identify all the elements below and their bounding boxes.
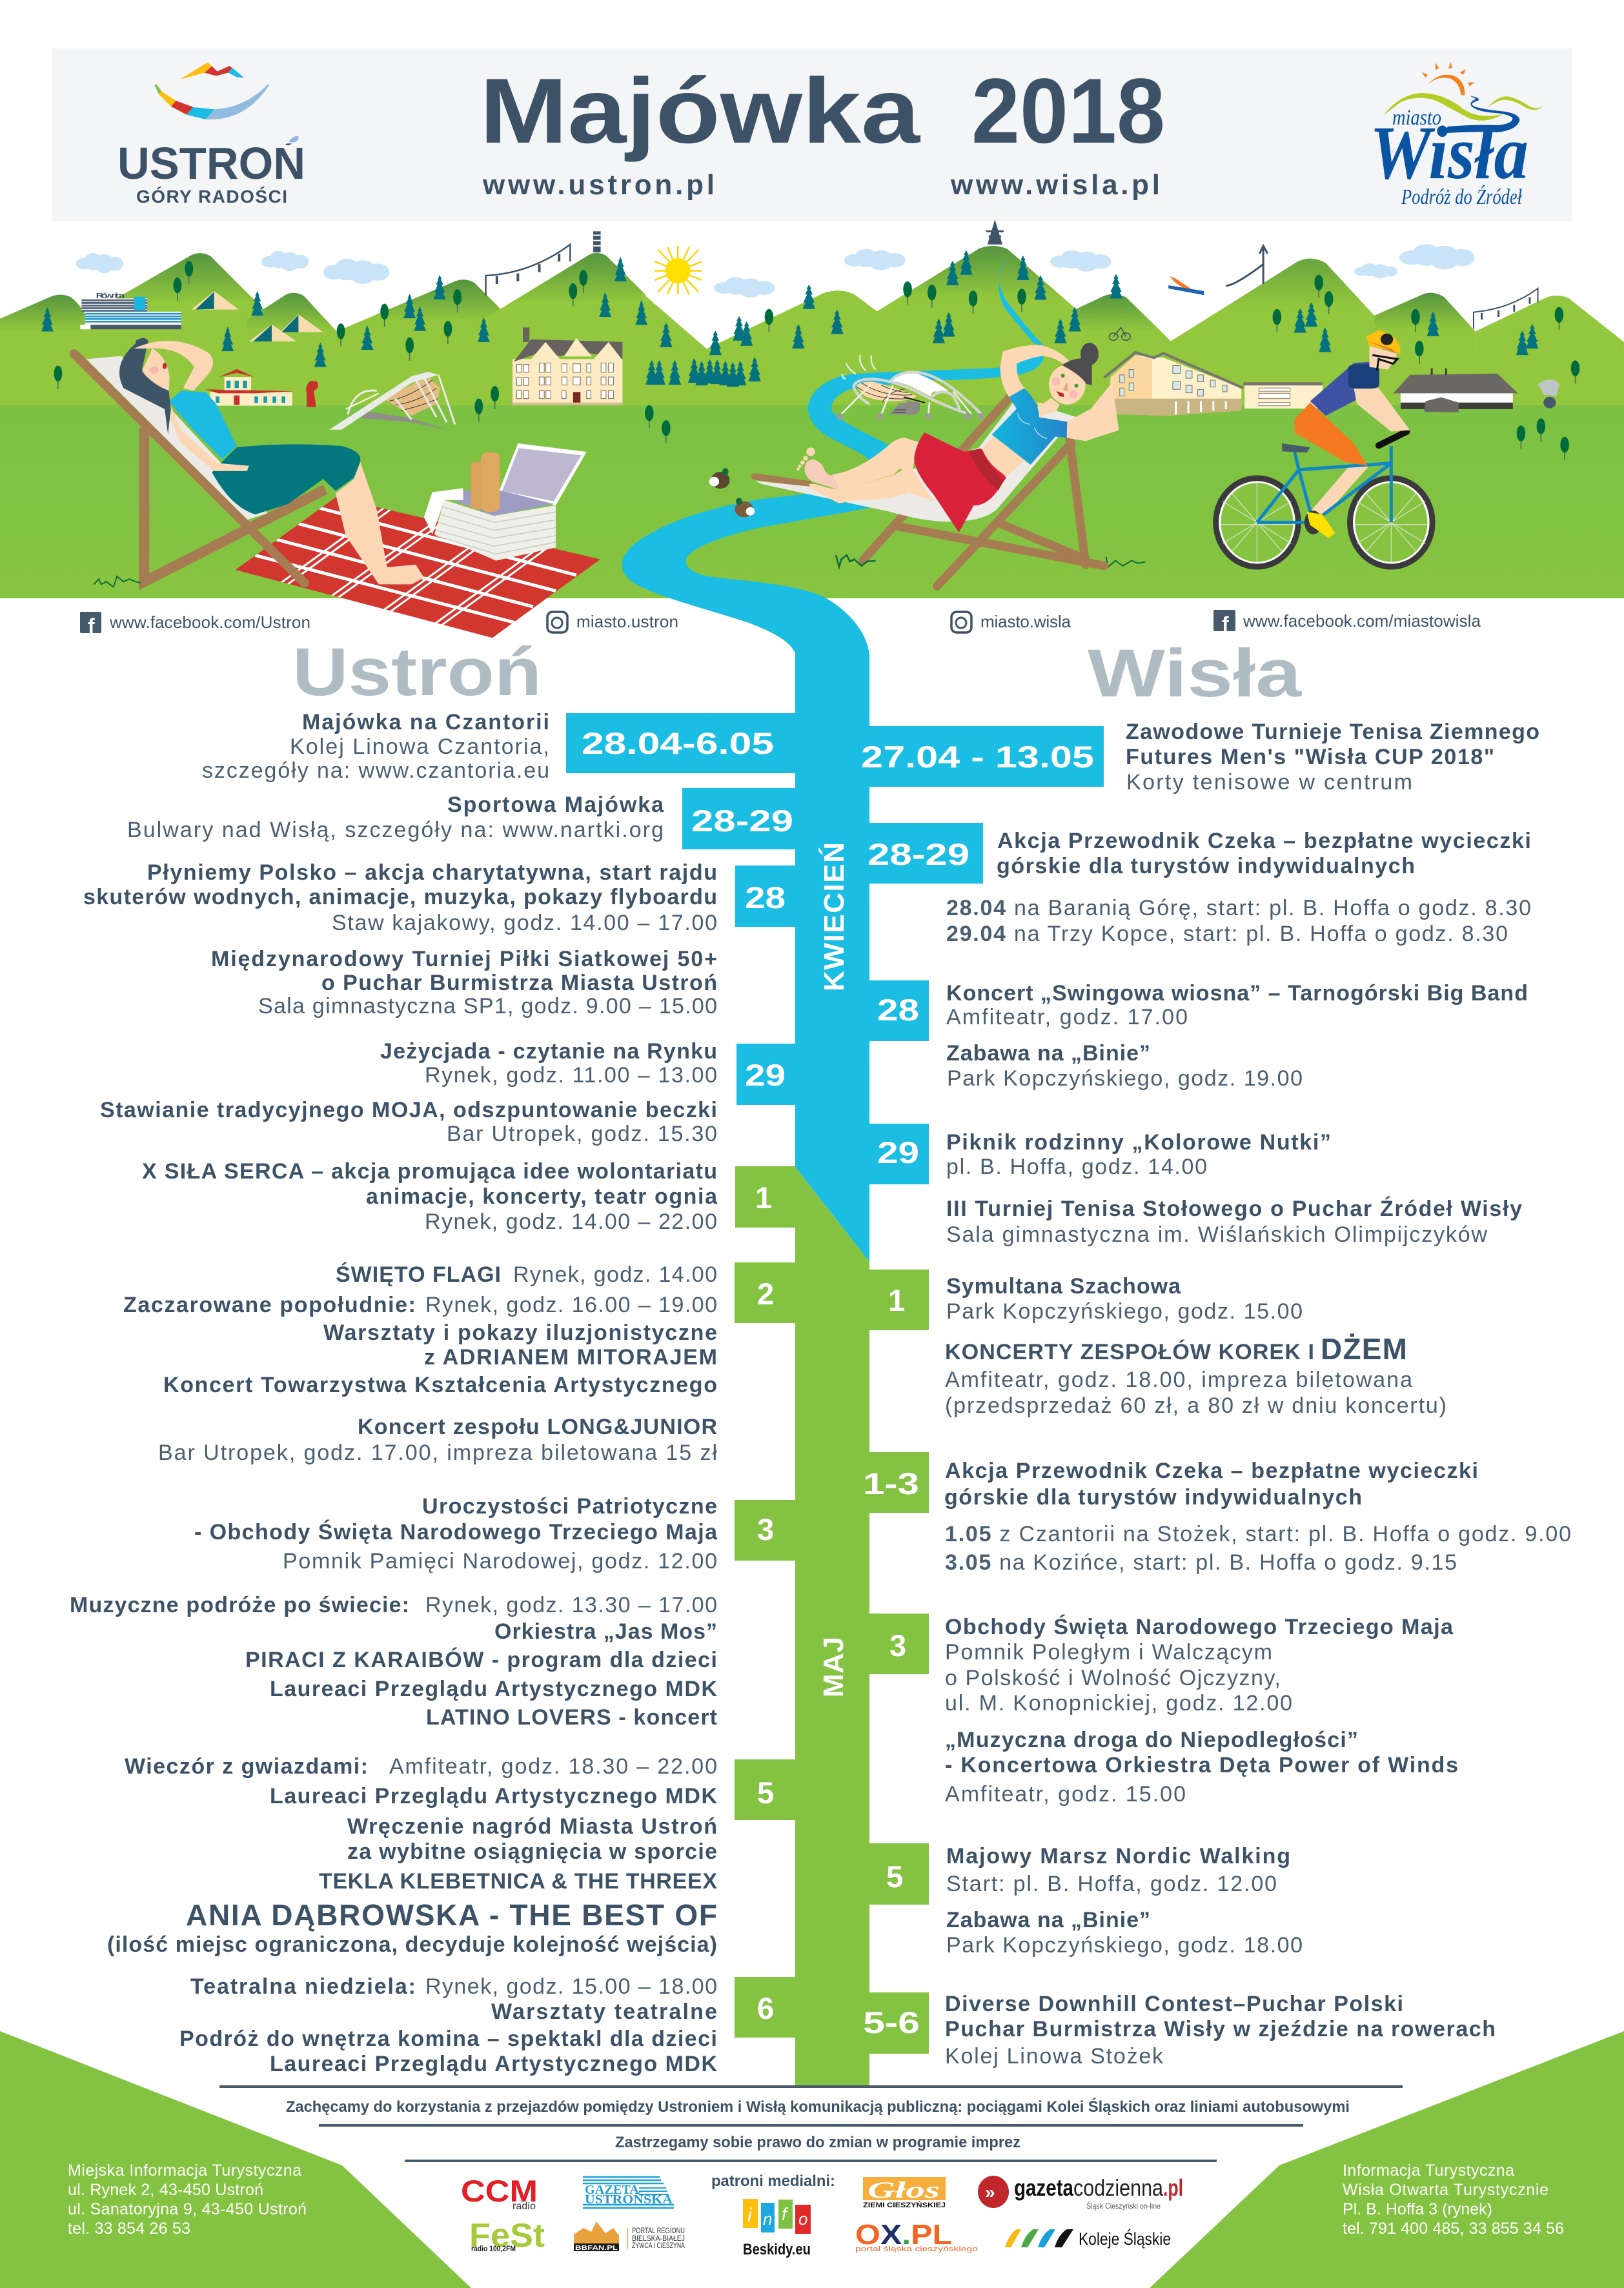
website links: www.ustron.pl [482, 169, 715, 201]
event: Puchar Burmistrza Wisły w zjeździe na rowerach [945, 2017, 1496, 2041]
event: Amfiteatr, godz. 17.00 [946, 1005, 1188, 1029]
event: ul. M. Konopnickiej, godz. 12.00 [945, 1691, 1292, 1716]
social link: Facebook Ustroń [80, 612, 310, 638]
event: - Obchody Święta Narodowego Trzeciego Maja [194, 1520, 718, 1544]
ski jumper [1168, 276, 1204, 295]
event: Diverse Downhill Contest–Puchar Polski [945, 1992, 1403, 2016]
logo: Głos Ziemi Cieszyńskiej: ZIEMI CIESZYŃSKIEJ [863, 2201, 946, 2209]
logo: Wisła: miasto [1392, 106, 1441, 130]
social link: Instagram Ustroń: miasto.ustron [576, 612, 678, 631]
timeline date boxes: April [566, 713, 1104, 1184]
event: Warsztaty teatralne [491, 1999, 717, 2024]
timeline date boxes: May: 3 [757, 1512, 774, 1546]
event: ŚWIĘTO FLAGI [336, 1262, 501, 1287]
logo: Gazeta Ustrońska: GAZETA [585, 2183, 640, 2197]
event: 1.05 z Czantorii na Stożek, start: pl. B. Hoffa o godz. 9.00 [945, 1522, 1571, 1546]
logo: Fest radio: radio 100,2FM [471, 2244, 516, 2253]
event: Bar Utropek, godz. 17.00, impreza biletowana 15 zł [158, 1441, 717, 1465]
logo: OX.PL [855, 2219, 978, 2253]
grass tuft [1106, 556, 1145, 567]
event: 28.04 na Baranią Górę, start: pl. B. Hoffa o godz. 8.30 [946, 896, 1531, 920]
event: Symultana Szachowa [946, 1274, 1181, 1299]
event [945, 1332, 1446, 1418]
round trees left [54, 261, 587, 421]
timeline date boxes: April: 28.04-6.05 [582, 726, 774, 760]
event [380, 1039, 717, 1088]
label: patroni medialni: patroni medialni: [711, 2172, 835, 2190]
event: Podróż do wnętrza komina – spektakl dla dzieci [179, 2027, 717, 2051]
fir trees left [41, 257, 647, 367]
event: Rynek, godz. 14.00 – 22.00 [425, 1210, 717, 1234]
logo: gazetacodzienna.pl: Śląsk Cieszyński on-line [1086, 2201, 1161, 2211]
footer corner: Wisła tourist info: Wisła Otwarta Turystycznie [1343, 2181, 1548, 2199]
event: za wybitne osiągnięcia w sporcie [347, 1839, 717, 1864]
picnic blanket [236, 498, 600, 638]
event [944, 1459, 1571, 1575]
panel: media patrons [461, 2172, 1183, 2258]
panel: Wisła April events [946, 720, 1539, 1247]
manor house [513, 327, 622, 405]
timeline date boxes: May: 6 [757, 1991, 774, 2025]
event: Sportowa Majówka [447, 793, 664, 817]
event: Sala gimnastyczna SP1, godz. 9.00 – 15.00 [258, 994, 717, 1018]
logo: info Beskidy.eu: f [782, 2204, 789, 2224]
event: Uroczystości Patriotyczne [422, 1494, 717, 1519]
trees and scenery right [645, 219, 1579, 567]
timeline date boxes: May: 3 [889, 1628, 906, 1663]
website links [482, 169, 1160, 201]
hotel Równica [80, 292, 181, 329]
event: Pomnik Poległym i Walczącym [945, 1640, 1272, 1665]
woman left [119, 338, 424, 584]
event [946, 1130, 1331, 1179]
event [179, 1974, 717, 2076]
Wisła amphitheatre, deck chair and reclining woman [755, 342, 1119, 586]
logo: Fest radio: FeSt [469, 2217, 545, 2254]
event: Park Kopczyńskiego, godz. 18.00 [946, 1933, 1303, 1958]
event: Majowy Marsz Nordic Walking [946, 1844, 1290, 1868]
event: Zabawa na „Binie” [946, 1908, 1150, 1932]
footer corner: Wisła tourist info: Pl. B. Hoffa 3 (rynek) [1343, 2200, 1492, 2218]
pyramid buildings [192, 291, 323, 341]
event [1126, 720, 1539, 795]
logo: BBFAN: BIELSKA-BIAŁEJ [632, 2234, 685, 2243]
title [480, 60, 1165, 163]
event: Rynek, godz. 13.30 – 17.00 [425, 1593, 717, 1617]
railway station [206, 369, 318, 407]
footer corner: Wisła tourist info [1150, 2031, 1624, 2288]
bike icon [1109, 327, 1130, 340]
amphitheatre Wisła [837, 356, 983, 419]
footer corner: Ustroń tourist info [0, 2031, 471, 2288]
event: Akcja Przewodnik Czeka – bezpłatne wycieczki [945, 1459, 1478, 1483]
timeline date boxes: April: 28 [877, 993, 919, 1027]
round trees right [645, 275, 1579, 460]
timeline date boxes: May: 1 [755, 1180, 772, 1215]
event: Kolej Linowa Czantoria, [290, 734, 549, 759]
event: Sala gimnastyczna im. Wiślańskich Olimpijczyków [946, 1222, 1487, 1247]
event: o Polskość i Wolność Ojczyzny, [945, 1666, 1281, 1690]
event: górskie dla turystów indywidualnych [944, 1485, 1362, 1510]
timeline date boxes: May [735, 1166, 929, 2054]
month label: Maj: MAJ [818, 1637, 849, 1697]
footer corner: Ustroń tourist info: ul. Sanatoryjna 9, 43-450 Ustroń [68, 2200, 307, 2218]
event [163, 1321, 717, 1397]
social link: Instagram Wisła: miasto.wisla [980, 612, 1071, 631]
title: 2018 [971, 60, 1165, 163]
logo: CCM radio: CCM [461, 2174, 538, 2208]
event [83, 860, 717, 935]
event [946, 829, 1531, 946]
ducks [709, 468, 755, 517]
event: Amfiteatr, godz. 18.30 – 22.00 [389, 1754, 717, 1779]
logo: Głos Ziemi Cieszyńskiej: Głos [868, 2177, 940, 2203]
footer notes: Zastrzegamy sobie prawo do zmian w programie imprez [615, 2134, 1020, 2151]
social link: Facebook Wisła [1213, 610, 1481, 636]
logo: gazetacodzienna.pl: » [985, 2182, 995, 2202]
timeline column: green May section [795, 1167, 869, 2087]
river loop [808, 342, 1044, 460]
logo: info Beskidy.eu: o [798, 2209, 807, 2229]
event [158, 1415, 717, 1465]
social link: Facebook Wisła: f [1222, 612, 1229, 636]
event [946, 1041, 1303, 1091]
logo: Wisła: Podróż do Źródeł [1401, 185, 1523, 209]
panel: Wisła May events [944, 1274, 1571, 2069]
event: Laureaci Przeglądu Artystycznego MDK [270, 1784, 717, 1808]
heading: Ustroń: Ustroń [292, 634, 542, 710]
event: Teatralna niedziela: [190, 1974, 416, 1999]
social link: Facebook Ustroń: www.facebook.com/Ustron [109, 612, 310, 632]
event: Jeżycjada - czytanie na Rynku [380, 1039, 717, 1064]
event: pl. B. Hoffa, godz. 14.00 [946, 1155, 1207, 1179]
event [946, 1844, 1290, 1896]
deck chair right [755, 398, 1104, 586]
footer corner: Wisła tourist info: Informacja Turystyczna [1343, 2161, 1514, 2180]
logo: Wisła: Wisła [1370, 110, 1528, 195]
event: Park Kopczyńskiego, godz. 15.00 [946, 1299, 1303, 1324]
panel: landscape illustration [0, 219, 1624, 1262]
event [211, 947, 717, 1018]
event: skuterów wodnych, animacje, muzyka, pokazy flyboardu [83, 885, 717, 909]
event [127, 793, 664, 842]
footer notes: Zachęcamy do korzystania z przejazdów pomiędzy Ustroniem i Wisłą komunikacją publiczną: pociągami Kolei Śląskich oraz liniami autobusowymi [286, 2098, 1350, 2116]
fir trees right [660, 250, 1538, 355]
cyclist [1216, 330, 1432, 567]
event: Majówka na Czantorii [302, 710, 549, 734]
logo: BBFAN: PORTAL REGIONU [632, 2226, 685, 2235]
event: Wieczór z gwiazdami: [125, 1754, 368, 1779]
tower left [593, 231, 601, 252]
event: Pomnik Pamięci Narodowej, godz. 12.00 [283, 1549, 717, 1574]
logo: Ustroń: GÓRY RADOŚCI [136, 187, 287, 207]
amphitheatre Ustroń [329, 372, 455, 430]
grass [0, 405, 1624, 598]
panel: header banner [52, 48, 1572, 221]
website links: www.wisla.pl [950, 169, 1160, 201]
title: Majówka [480, 60, 921, 163]
event: Zawodowe Turnieje Tenisa Ziemnego [1126, 720, 1539, 744]
woman right [797, 343, 1119, 532]
timeline date boxes: May: 5 [886, 1859, 903, 1894]
event: Rynek, godz. 11.00 – 13.00 [425, 1063, 717, 1088]
logo: CCM radio: radio [513, 2201, 536, 2212]
event: Koncert „Swingowa wiosna” – Tarnogórski Big Band [946, 981, 1528, 1006]
event: (przedsprzedaż 60 zł, a 80 zł w dniu koncertu) [945, 1393, 1446, 1418]
trees and scenery left [41, 231, 647, 638]
event: Laureaci Przeglądu Artystycznego MDK [270, 2052, 717, 2076]
event: 3.05 na Kozińce, start: pl. B. Hoffa o godz. 9.15 [945, 1550, 1457, 1575]
logo: BBFAN: BBFAN.PL [575, 2245, 618, 2252]
clouds right [714, 244, 1475, 298]
deck chair left [74, 354, 325, 587]
event [194, 1494, 718, 1574]
long building [1104, 352, 1323, 416]
footer notes [219, 2085, 1403, 2162]
timeline date boxes: May: 5 [757, 1776, 774, 1810]
event [945, 1728, 1458, 1807]
event: „Muzyczna droga do Niepodległości” [945, 1728, 1358, 1752]
social link: Facebook Ustroń: f [88, 614, 95, 638]
event [142, 1159, 718, 1234]
logo: OX.PL: OX.PL [855, 2219, 952, 2251]
event: TEKLA KLEBETNICA & THE THREEX [319, 1869, 717, 1894]
event: Amfiteatr, godz. 18.00, impreza biletowana [945, 1368, 1412, 1392]
event: Park Kopczyńskiego, godz. 19.00 [947, 1066, 1303, 1091]
event: szczegóły na: www.czantoria.eu [202, 758, 549, 783]
panel: Ustroń May events [70, 1159, 718, 2076]
event: Rynek, godz. 16.00 – 19.00 [425, 1293, 717, 1317]
footer corner: Ustroń tourist info: Miejska Informacja Turystyczna [68, 2161, 301, 2180]
event [946, 1197, 1522, 1247]
logo: Ustroń: USTROŃ [117, 138, 305, 188]
timeline date boxes: April: 28-29 [868, 837, 969, 871]
logo: Głos Ziemi Cieszyńskiej [863, 2177, 946, 2209]
footer corner: Ustroń tourist info: ul. Rynek 2, 43-450 Ustroń [68, 2181, 263, 2199]
event: Rynek, godz. 14.00 [513, 1262, 717, 1287]
event: Zaczarowane popołudnie: [123, 1293, 416, 1317]
event: Warsztaty i pokazy iluzjonistyczne [323, 1321, 717, 1345]
event: górskie dla turystów indywidualnych [997, 854, 1415, 878]
timeline date boxes: April: 29 [877, 1135, 919, 1169]
event: Amfiteatr, godz. 15.00 [945, 1782, 1186, 1807]
event [946, 1908, 1303, 1958]
event: - Koncertowa Orkiestra Dęta Power of Winds [945, 1753, 1458, 1777]
sun [655, 246, 702, 294]
clouds left [76, 251, 389, 284]
logo: Wisła [1370, 62, 1543, 209]
event: X SIŁA SERCA – akcja promująca idee wolontariatu [142, 1159, 717, 1184]
timeline date boxes: May: 2 [757, 1277, 774, 1311]
event: Futures Men's "Wisła CUP 2018" [1126, 745, 1494, 769]
event [70, 1593, 717, 1730]
event: Koncert zespołu LONG&JUNIOR [358, 1415, 717, 1439]
logo: BBFAN: ŻYWCA I CIESZYNA [632, 2241, 685, 2250]
month label: Kwiecień: KWIECIEŃ [818, 842, 850, 991]
logo: OX.PL: portal śląska cieszyńskiego [855, 2245, 978, 2253]
logo: gazetacodzienna.pl: gazeta [1014, 2174, 1074, 2201]
logo: Gazeta Ustrońska [583, 2177, 674, 2208]
event: Rynek, godz. 15.00 – 18.00 [425, 1974, 717, 1999]
event: DŻEM [1321, 1332, 1407, 1366]
logo: Gazeta Ustrońska: USTROŃSKA [585, 2192, 673, 2207]
event [946, 981, 1528, 1029]
hotel Równica: Równica [96, 292, 125, 299]
event: animacje, koncerty, teatr ognia [366, 1184, 718, 1209]
event: Koncert Towarzystwa Kształcenia Artystycznego [163, 1373, 717, 1397]
event: KONCERTY ZESPOŁÓW KOREK I [945, 1340, 1314, 1364]
event: Bulwary nad Wisłą, szczegóły na: www.nartki.org [127, 818, 664, 842]
panel: Ustroń April events [83, 710, 717, 1146]
event: Kolej Linowa Stożek [945, 2044, 1164, 2069]
logo: info Beskidy.eu: i [747, 2205, 753, 2226]
event [123, 1262, 717, 1317]
event: headline concert: (ilość miejsc ograniczona, decyduje kolejność wejścia) [107, 1932, 717, 1957]
event: Piknik rodzinny „Kolorowe Nutki” [946, 1130, 1331, 1155]
event: LATINO LOVERS - koncert [426, 1705, 717, 1730]
event: III Turniej Tenisa Stołowego o Puchar Źródeł Wisły [946, 1197, 1522, 1221]
river [622, 487, 869, 1262]
event: Międzynarodowy Turniej Piłki Siatkowej 50+ [211, 947, 717, 971]
timeline date boxes: April: 27.04 - 13.05 [861, 740, 1094, 774]
event [946, 1274, 1303, 1324]
logo: gazetacodzienna.pl: codzienna [1073, 2174, 1164, 2201]
logo: info Beskidy.eu: n [763, 2209, 772, 2229]
mountains left [0, 253, 645, 407]
event: o Puchar Burmistrza Miasta Ustroń [321, 971, 717, 995]
timeline date boxes: May: 1-3 [863, 1466, 919, 1501]
logo: info Beskidy.eu: Beskidy.eu [743, 2241, 811, 2258]
mountains right [642, 246, 1624, 407]
timeline date boxes: May: 1 [888, 1283, 905, 1317]
event: Wręczenie nagród Miasta Ustroń [347, 1814, 717, 1839]
event: PIRACI Z KARAIBÓW - program dla dzieci [245, 1648, 717, 1672]
timeline date boxes: April: 28 [745, 880, 786, 915]
ski lift left [486, 245, 570, 296]
event: Laureaci Przeglądu Artystycznego MDK [270, 1677, 717, 1701]
ski jump [1226, 246, 1268, 286]
event: Obchody Święta Narodowego Trzeciego Maja [945, 1615, 1454, 1639]
tower right [986, 219, 1004, 245]
event: Bar Utropek, godz. 15.30 [447, 1122, 717, 1146]
event: Staw kajakowy, godz. 14.00 – 17.00 [332, 911, 717, 935]
logo: Koleje Śląskie [1005, 2228, 1171, 2249]
event: Korty tenisowe w centrum [1126, 770, 1412, 795]
event: Zabawa na „Binie” [946, 1041, 1150, 1066]
chalet [1393, 369, 1518, 412]
picnic basket and baguettes [424, 443, 587, 561]
timeline date boxes: May: 5-6 [863, 2005, 920, 2040]
event: Muzyczne podróże po świecie: [70, 1593, 409, 1617]
timeline date boxes: April: 29 [745, 1058, 786, 1092]
event [945, 1992, 1496, 2069]
heading: Wisła: Wisła [1088, 636, 1303, 711]
logo: Koleje Śląskie: Koleje Śląskie [1079, 2228, 1171, 2249]
logo: info Beskidy.eu [743, 2199, 811, 2258]
footer corner: Ustroń tourist info: tel. 33 854 26 53 [68, 2220, 190, 2238]
event: Akcja Przewodnik Czeka – bezpłatne wycieczki [997, 829, 1531, 853]
event: 29.04 na Trzy Kopce, start: pl. B. Hoffa o godz. 8.30 [946, 922, 1508, 946]
event: z ADRIANEM MITORAJEM [424, 1345, 717, 1370]
event: headline concert [107, 1898, 717, 1957]
event [125, 1754, 717, 1894]
logo: Ustroń [117, 63, 305, 207]
logo: gazetacodzienna.pl [978, 2174, 1183, 2211]
footer corner: Wisła tourist info: tel. 791 400 485, 33 855 34 56 [1343, 2220, 1564, 2238]
event: Płyniemy Polsko – akcja charytatywna, start rajdu [147, 860, 717, 885]
logo: gazetacodzienna.pl: .pl [1163, 2174, 1183, 2201]
statue [1538, 380, 1559, 409]
event: headline concert: ANIA DĄBROWSKA - THE BEST OF [186, 1898, 717, 1932]
event: Stawianie tradycyjnego MOJA, odszpuntowanie beczki [100, 1098, 717, 1122]
stream on mountain [999, 254, 1044, 346]
fir cluster [645, 357, 761, 387]
event [202, 710, 549, 783]
event [100, 1098, 717, 1146]
event [945, 1615, 1454, 1716]
logo: BBFAN [574, 2222, 685, 2252]
event: Start: pl. B. Hoffa, godz. 12.00 [946, 1872, 1277, 1896]
ski lift right [1474, 289, 1538, 329]
event: Orkiestra „Jas Mos” [494, 1619, 717, 1644]
social link: Facebook Wisła: www.facebook.com/miastowisla [1243, 611, 1481, 631]
timeline date boxes: April: 28-29 [691, 804, 793, 838]
